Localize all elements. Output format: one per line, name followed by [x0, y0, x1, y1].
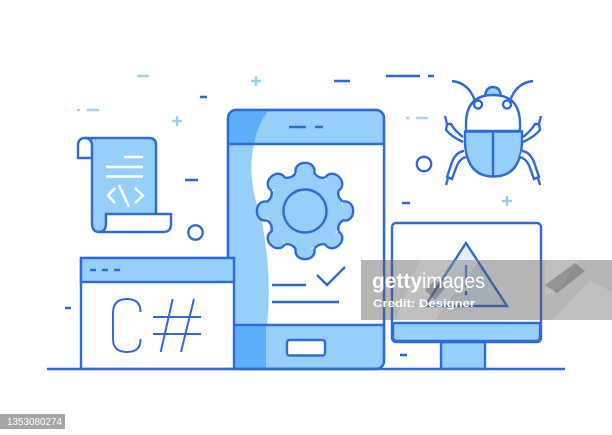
panel: smartphone — [228, 110, 384, 369]
image id tag — [0, 414, 65, 429]
warning triangle — [425, 243, 507, 306]
ground line — [47, 368, 565, 370]
panel: C# code window — [81, 258, 234, 369]
icon: code scroll — [78, 138, 171, 232]
C# label — [113, 299, 201, 352]
phone outline — [228, 110, 384, 369]
phone screen — [251, 144, 383, 325]
phone top and bottom darker accent — [229, 111, 268, 368]
image id tag: 1353080274 — [7, 417, 62, 428]
watermark band — [361, 260, 612, 320]
decorative marks: dashes, plus signs and circles — [65, 76, 512, 355]
watermark band: Credit: Designer — [373, 298, 476, 310]
icon: gear — [257, 163, 353, 259]
phone button — [287, 340, 325, 356]
watermark band: getty — [372, 270, 422, 293]
watermark band: images — [422, 270, 485, 293]
check mark and text lines — [272, 267, 345, 302]
panel: monitor with warning — [392, 223, 541, 369]
icon: bug — [445, 81, 541, 185]
